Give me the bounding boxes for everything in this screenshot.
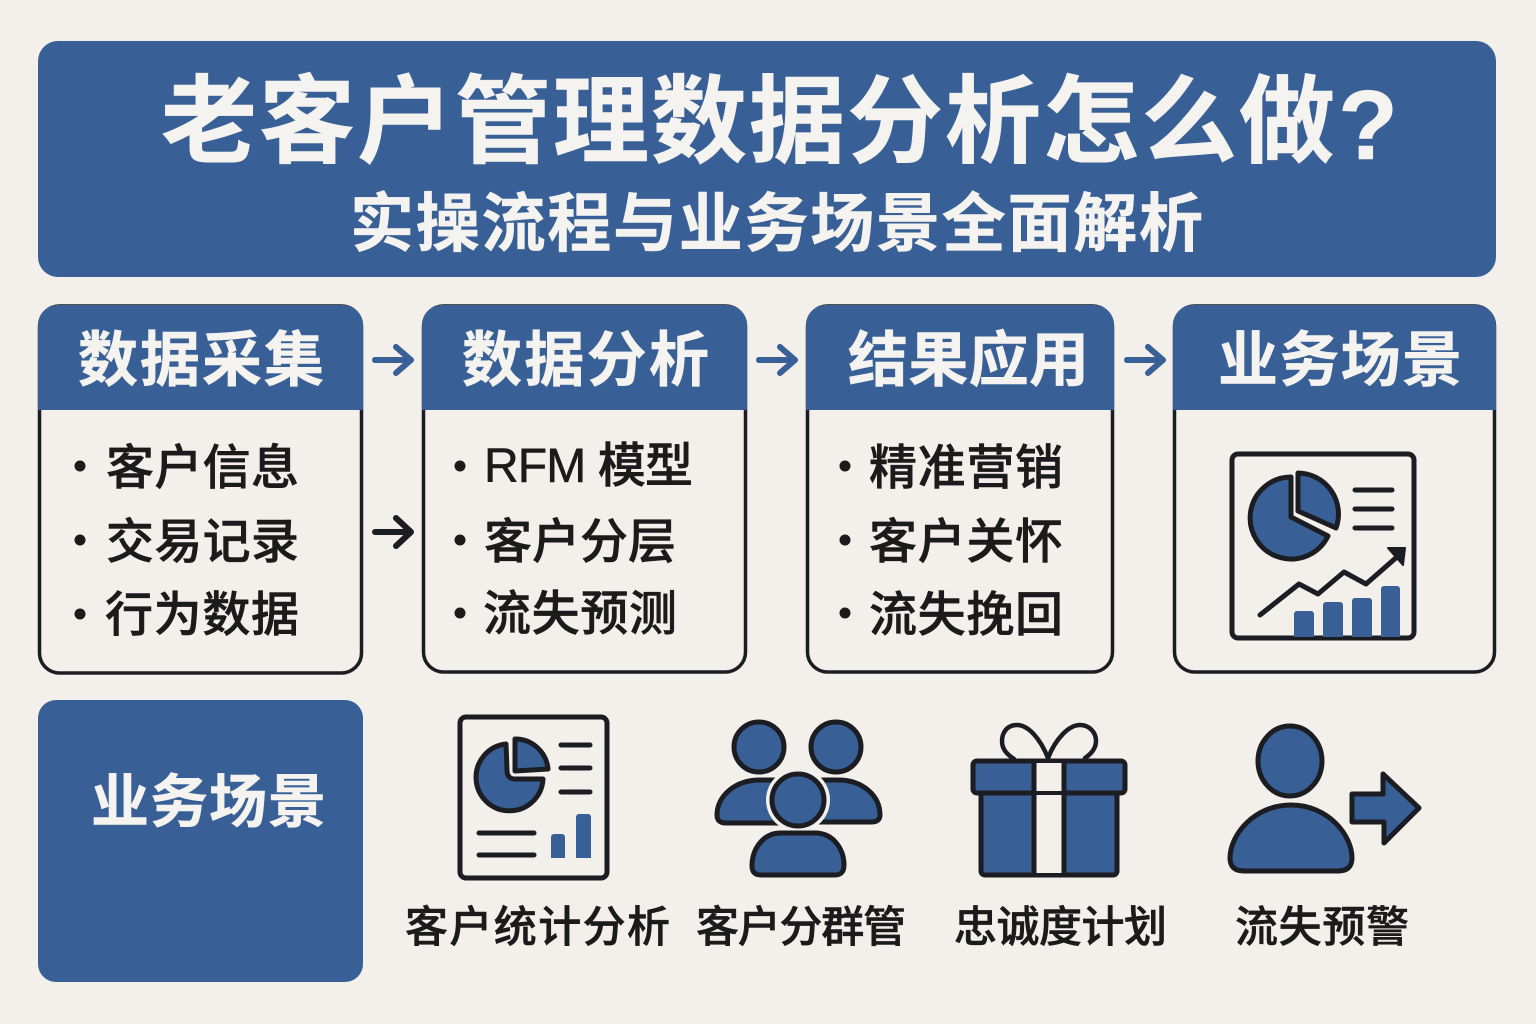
main title: 老客户管理数据分析怎么做 <box>161 69 1335 176</box>
heading: 数据采集: 数据采集 <box>78 327 324 394</box>
icon: customer churn alert <box>1230 726 1419 871</box>
label: 客户统计分析: 客户统计分析 <box>405 904 670 952</box>
heading: 结果应用: 结果应用 <box>848 327 1089 394</box>
heading: 数据分析: 数据分析 <box>462 327 709 394</box>
subtitle: 实操流程与业务场景全面解析 <box>350 188 1203 260</box>
list: 数据分析 items <box>454 440 693 641</box>
list: 数据分析 items: RFM 模型 <box>484 440 693 493</box>
list: 数据采集 items <box>74 442 299 642</box>
arrow: 采集 to 分析 <box>375 347 411 373</box>
icon: dashboard report <box>1232 454 1414 638</box>
list: 数据采集 items: 交易记录 <box>106 516 299 569</box>
main title: ? <box>1338 70 1398 180</box>
title banner <box>38 41 1496 277</box>
icon: customer group <box>717 722 880 875</box>
icon: gift box <box>973 725 1125 875</box>
label: 客户分群管: 客户分群管 <box>696 904 906 952</box>
list: 数据分析 items: 客户分层 <box>484 516 676 569</box>
arrow: 采集 to 分析 lower <box>375 518 411 546</box>
list: 结果应用 items <box>840 442 1063 642</box>
list: 结果应用 items: 客户关怀 <box>869 516 1063 569</box>
icon: customer statistics report <box>460 717 607 878</box>
panel: 业务场景 bottom block <box>38 700 363 982</box>
panel: 数据采集 <box>38 305 363 673</box>
list: 结果应用 items: 流失挽回 <box>869 589 1063 642</box>
heading: 业务场景: 业务场景 <box>1218 327 1462 394</box>
label: 流失预警: 流失预警 <box>1235 904 1409 952</box>
arrow: 分析 to 应用 <box>759 347 795 373</box>
panel: 数据分析 <box>422 305 747 672</box>
list: 结果应用 items: 精准营销 <box>869 442 1063 495</box>
arrow: 应用 to 场景 <box>1127 347 1163 373</box>
panel: 结果应用 <box>806 305 1114 672</box>
list: 数据采集 items: 客户信息 <box>106 442 299 495</box>
list: 数据采集 items: 行为数据 <box>105 589 299 642</box>
label: 忠诚度计划: 忠诚度计划 <box>954 904 1167 952</box>
list: 数据分析 items: 流失预测 <box>483 588 677 641</box>
heading: 业务场景 bottom: 业务场景 <box>91 770 326 835</box>
panel: 业务场景 <box>1173 305 1496 672</box>
